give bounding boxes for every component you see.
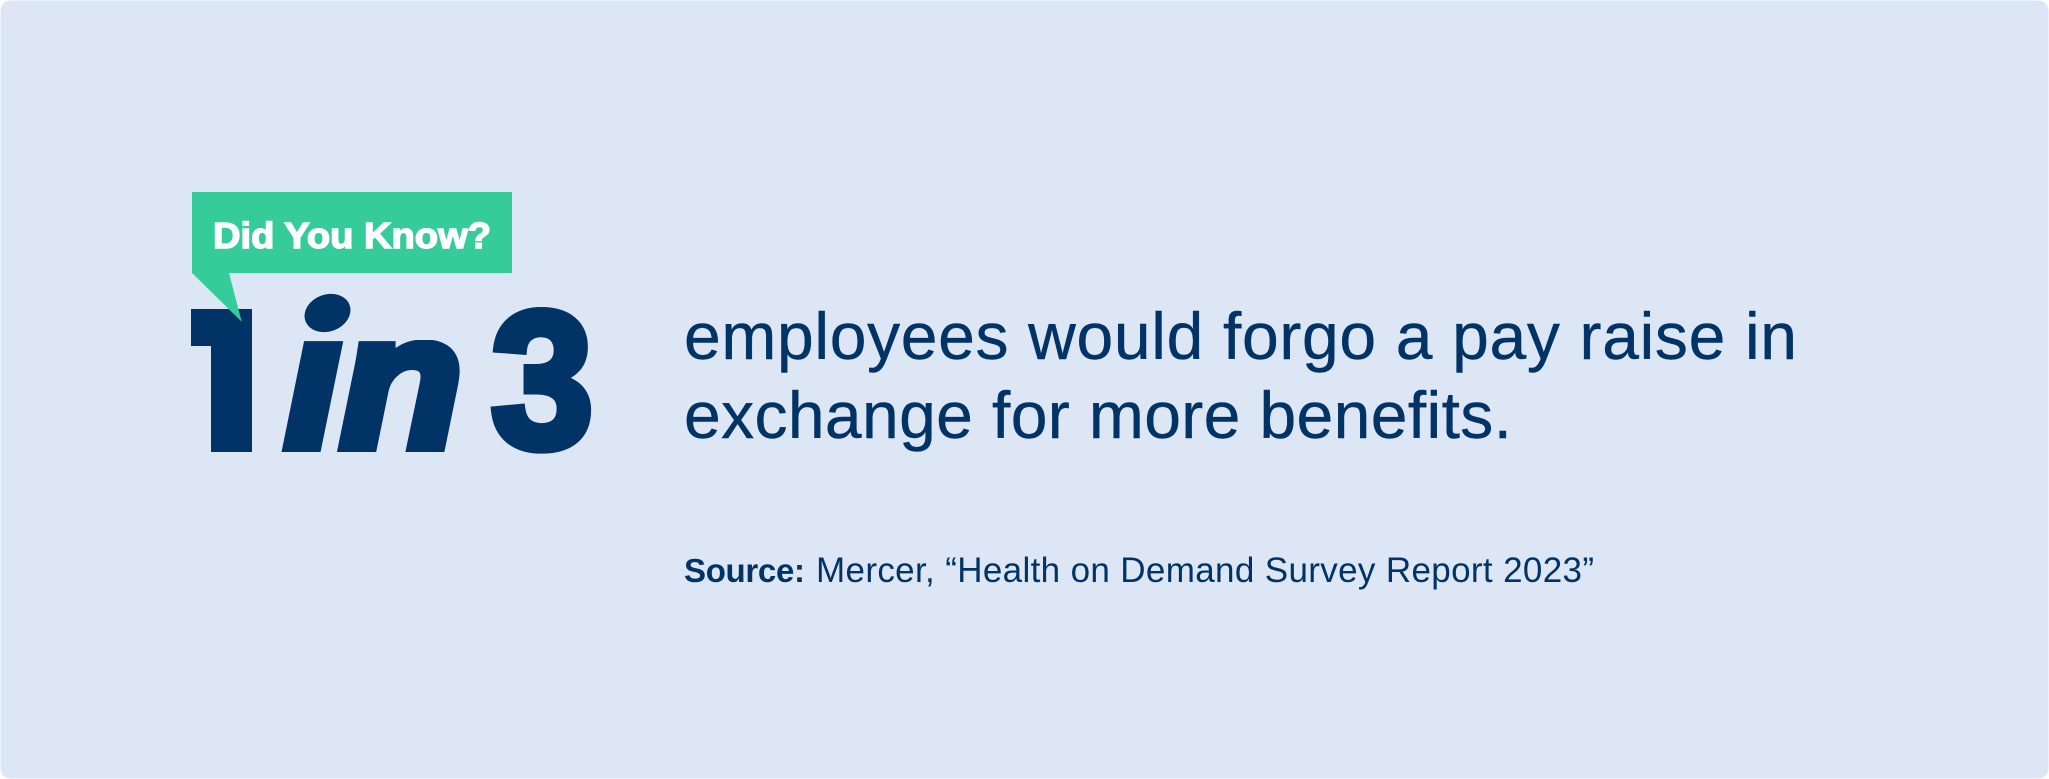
speech bubble: [192, 192, 512, 322]
numeral 1: 1: [156, 267, 315, 496]
statistic: 1 in 3: [191, 294, 592, 454]
numeral 3: 3: [491, 273, 594, 489]
i dot: [299, 288, 356, 338]
statement line 2: exchange for more benefits.: [684, 378, 1512, 452]
callout label: Did You Know?: [213, 215, 491, 256]
statement text: [684, 299, 1797, 452]
source citation: Source:: [684, 552, 805, 589]
word: in: in: [285, 276, 462, 488]
callout: Did You Know?: [192, 192, 512, 322]
source citation: Mercer, “Health on Demand Survey Report 2023”: [816, 551, 1594, 590]
statement line 1: employees would forgo a pay raise in: [684, 299, 1797, 373]
